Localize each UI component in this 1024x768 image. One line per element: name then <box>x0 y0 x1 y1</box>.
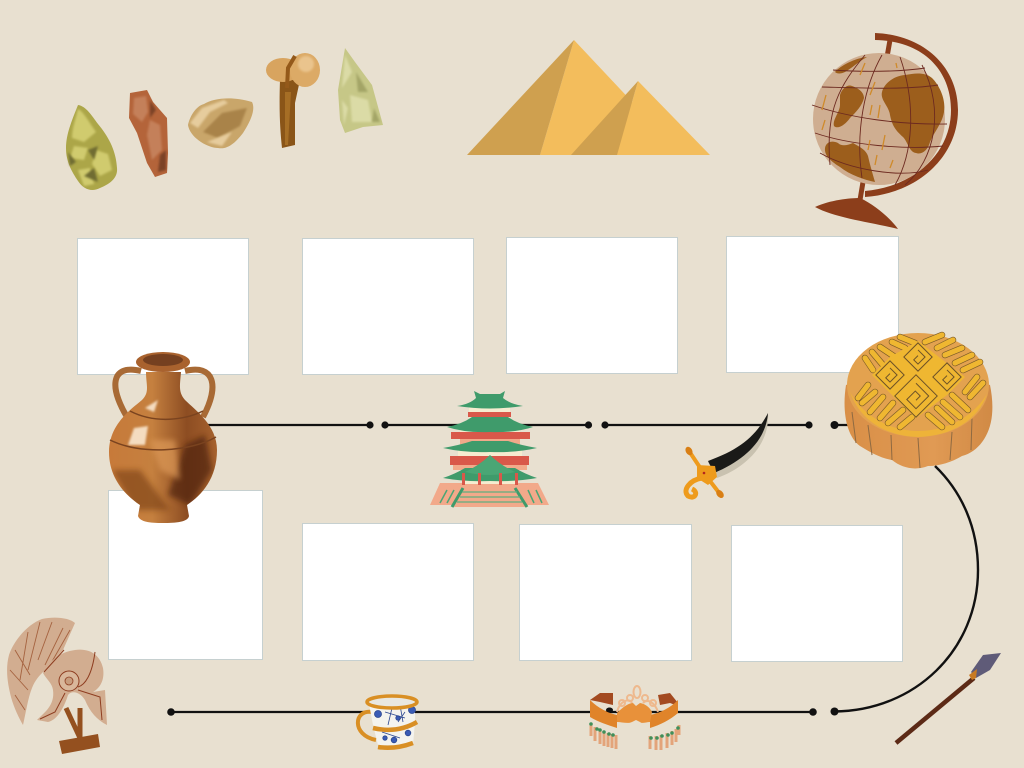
icon: stone tools <box>66 48 383 190</box>
icon: globe <box>812 33 958 229</box>
headband bands <box>590 700 678 728</box>
pagoda roofs <box>443 391 537 481</box>
icon: hafted stone hammer <box>266 53 320 148</box>
vase body <box>109 372 217 523</box>
panel: top row box 2 <box>302 238 474 374</box>
headband filigree <box>617 686 658 712</box>
panel: bottom row box 1 <box>108 490 262 660</box>
mooncake bar outlines <box>858 335 983 427</box>
helmet cheek boss <box>59 671 79 691</box>
headband dot <box>606 708 613 712</box>
panel: bottom row box 4 <box>732 526 902 662</box>
globe continents <box>825 57 944 182</box>
timeline: upper track with dots <box>200 421 860 429</box>
headband centre medallion <box>617 703 652 723</box>
cup rim <box>367 696 417 708</box>
icon: pagoda <box>430 391 549 507</box>
mooncake bars <box>858 335 983 427</box>
helmet stand <box>66 708 80 738</box>
timeline: lower track with dots <box>167 708 838 716</box>
tassel beads <box>589 722 680 740</box>
mooncake central spirals <box>872 341 965 418</box>
globe grid lines <box>812 55 947 185</box>
mooncake body <box>845 360 992 468</box>
vase handles <box>115 370 212 417</box>
pagoda upper walls <box>469 407 510 418</box>
helmet lines <box>40 650 102 720</box>
panel: bottom row box 2 <box>302 524 474 660</box>
icon: ornate headband <box>589 686 680 750</box>
headband dark upper rims <box>590 693 678 706</box>
icon: flint arrowhead <box>338 48 383 133</box>
cup blue floral <box>374 705 416 743</box>
vase rings <box>110 411 216 450</box>
icon: porcelain cup <box>358 696 417 748</box>
panel: bottom row box 3 <box>520 524 692 660</box>
panel: top row box 3 <box>506 238 678 374</box>
icon: crested helmet <box>7 618 107 754</box>
icon: red flint <box>129 90 168 177</box>
mooncake rim <box>850 392 987 437</box>
timeline: curved connector <box>834 466 978 712</box>
cup gold bands <box>373 722 417 748</box>
icon: tan core stone <box>188 98 253 148</box>
cup body <box>369 704 415 745</box>
icon: curved sword <box>684 413 768 500</box>
pagoda base <box>430 483 549 505</box>
pagoda stairs <box>452 488 527 507</box>
pagoda side stripes <box>440 490 542 503</box>
icon: amphora vase <box>109 352 217 523</box>
pagoda railings <box>450 412 530 465</box>
headband tassels <box>591 725 679 750</box>
panel: top row box 1 <box>78 238 248 374</box>
cup handle <box>358 712 376 740</box>
vase lip <box>136 352 190 372</box>
icon: pyramids <box>467 40 710 155</box>
mooncake top <box>847 333 989 437</box>
vase highlights and shading <box>112 400 212 510</box>
pagoda pillars <box>462 473 518 485</box>
helmet shell <box>37 650 107 725</box>
helmet crest <box>7 618 75 725</box>
icon: hand axe <box>66 105 117 190</box>
panel: top row box 4 <box>726 236 898 372</box>
globe stand arc <box>865 33 958 197</box>
icon: spear <box>896 653 1001 743</box>
mooncake side ridges <box>852 412 972 468</box>
icon: mooncake <box>845 333 992 468</box>
globe sphere <box>813 53 945 185</box>
crest strands <box>10 622 70 710</box>
globe speckles <box>822 63 897 168</box>
globe base <box>815 198 898 229</box>
